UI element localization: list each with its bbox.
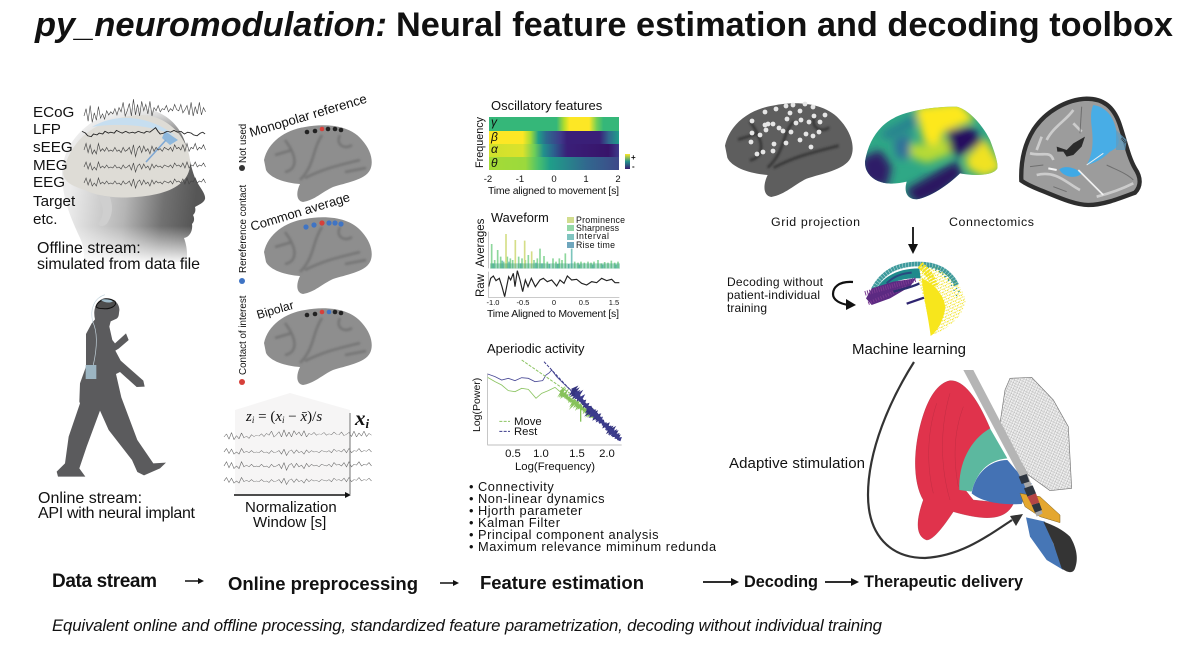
chart: waveform averages and raw trace: 1.5 xyxy=(609,298,619,307)
brain: connectivity colour map xyxy=(865,106,998,200)
normalization formula: x̄)/s xyxy=(300,409,322,425)
brain: monopolar reference xyxy=(248,91,372,202)
pipeline labels: Therapeutic delivery xyxy=(864,573,1023,591)
list: additional features xyxy=(470,482,716,551)
icon: walking person with implant xyxy=(57,295,166,477)
chart: log power spectrum: 1.5 xyxy=(569,448,585,460)
arrow: to machine learning xyxy=(908,227,918,254)
projection labels: Grid projection xyxy=(771,215,860,229)
chart: waveform averages and raw trace: 0.5 xyxy=(579,298,589,307)
normalization formula: i xyxy=(252,415,255,425)
list: additional features: • xyxy=(469,515,473,530)
chart: time-frequency heatmap: -1 xyxy=(516,174,524,185)
panel: machine learning xyxy=(727,264,966,358)
chart: time-frequency heatmap: α xyxy=(491,142,499,156)
chart: time-frequency heatmap: Time aligned to movement [s] xyxy=(488,185,619,197)
legend: electrode contact types: Rereference contact xyxy=(238,185,249,273)
brain: electrode grid projection xyxy=(725,102,853,197)
normalization caption: Normalization xyxy=(245,499,337,516)
list: additional features: • xyxy=(469,539,473,554)
modality list: EEG xyxy=(33,174,65,191)
brain: common average xyxy=(248,189,372,294)
modality list xyxy=(33,104,76,228)
decoding note xyxy=(727,275,824,315)
brain slice: connectomic tract map xyxy=(1021,99,1140,205)
online stream caption: Online stream: xyxy=(38,490,142,507)
panel: oscillatory features xyxy=(474,98,636,197)
normalization formula: i xyxy=(282,415,285,425)
offline stream caption: simulated from data file xyxy=(37,256,200,273)
online stream caption: API with neural implant xyxy=(38,505,196,522)
chart: log power spectrum xyxy=(471,360,622,473)
legend: electrode contact types xyxy=(238,124,249,385)
modality list: LFP xyxy=(33,121,61,138)
pipeline labels: Online preprocessing xyxy=(228,573,418,594)
legend: colorbar xyxy=(625,153,636,171)
chart: time-frequency heatmap: -2 xyxy=(484,174,492,185)
machine learning label: Machine learning xyxy=(852,341,966,358)
chart: log power spectrum: Move xyxy=(514,416,542,428)
list: additional features: Hjorth parameter xyxy=(478,503,583,518)
chart: log power spectrum: 2.0 xyxy=(599,448,615,460)
chart: decoding embedding scatter xyxy=(865,264,966,336)
chart: log power spectrum: 0.5 xyxy=(505,448,521,460)
chart: time-frequency heatmap: β xyxy=(490,130,498,144)
modality list: Target xyxy=(33,193,76,210)
normalization caption xyxy=(245,499,337,531)
illustration: subcortical anatomy with DBS lead xyxy=(915,370,1077,572)
arrow: preprocessing to features xyxy=(440,580,459,586)
chart: time-frequency heatmap: 0 xyxy=(551,174,557,185)
offline stream caption xyxy=(37,240,200,273)
chart: waveform averages and raw trace: Raw xyxy=(475,273,487,297)
normalization caption: Window [s] xyxy=(253,514,326,531)
heading: Oscillatory features xyxy=(491,98,603,113)
chart: log power spectrum: 1.0 xyxy=(533,448,549,460)
panel: normalization xyxy=(224,393,372,531)
icon: head silhouette with brain xyxy=(60,104,205,264)
chart: time-frequency heatmap: γ xyxy=(491,115,498,129)
chart: waveform averages and raw trace: Time Aligned to Movement [s] xyxy=(487,308,619,320)
panel: rereferencing schemes xyxy=(238,91,372,385)
arrow: features to decoding xyxy=(703,578,739,586)
chart: time-frequency heatmap: θ xyxy=(491,156,498,170)
normalization formula: x xyxy=(355,406,366,430)
list: additional features: • xyxy=(469,479,473,494)
projection labels xyxy=(771,215,1034,229)
list: additional features: Principal component analysis xyxy=(478,527,659,542)
modality list: sEEG xyxy=(33,139,73,156)
chart: time-frequency heatmap: 1 xyxy=(583,174,589,185)
legend: waveform metrics xyxy=(567,215,625,250)
chart: log power spectrum: Log(Frequency) xyxy=(515,461,595,473)
summary caption: Equivalent online and offline processing, standardized feature parametrization, decoding without individual training xyxy=(52,616,883,635)
normalization formula: i xyxy=(366,416,370,431)
panel: grid projection and connectomics xyxy=(725,99,1140,229)
normalization formula: = ( xyxy=(254,409,275,425)
pipeline labels: Decoding xyxy=(744,573,818,591)
decoding note: patient-individual xyxy=(727,288,820,302)
modality list: MEG xyxy=(33,157,68,174)
list: additional features: Non-linear dynamics xyxy=(478,491,605,506)
brain: common average: Common average xyxy=(248,189,352,234)
legend: waveform metrics: Rise time xyxy=(576,240,615,250)
heading: Waveform xyxy=(491,210,549,225)
arrow: stream to preprocessing xyxy=(185,578,204,584)
adaptive stimulation label: Adaptive stimulation xyxy=(729,455,865,472)
decoding note: training xyxy=(727,301,767,315)
normalization formula: − xyxy=(285,409,300,425)
list: additional features: • xyxy=(469,527,473,542)
brain: bipolar xyxy=(255,298,372,385)
legend: electrode contact types: Not used xyxy=(238,124,249,163)
arrow: decoding loop xyxy=(833,282,856,310)
list: additional features: Connectivity xyxy=(478,479,554,494)
chart: time-frequency heatmap: 2 xyxy=(615,174,621,185)
legend: waveform metrics: Sharpness xyxy=(576,223,620,233)
legend: waveform metrics: Interval xyxy=(576,231,609,241)
title xyxy=(34,6,1173,44)
legend: colorbar: - xyxy=(632,162,635,171)
chart: log power spectrum: Log(Power) xyxy=(471,378,483,432)
offline stream caption: Offline stream: xyxy=(37,240,141,257)
chart: waveform averages and raw trace: -1.0 xyxy=(487,298,499,307)
arrow: decoding to delivery xyxy=(825,578,859,586)
modality list: ECoG xyxy=(33,104,74,121)
chart: waveform averages and raw trace: Averages xyxy=(475,218,487,267)
normalization formula xyxy=(245,406,370,431)
chart: time-frequency heatmap: Frequency xyxy=(474,116,486,168)
legend: waveform metrics: Prominence xyxy=(576,215,625,225)
normalization formula: x xyxy=(275,409,282,425)
panel: waveform xyxy=(475,210,625,320)
online stream caption xyxy=(38,490,196,522)
legend: colorbar: + xyxy=(631,153,636,162)
arrow: normalization window xyxy=(234,492,351,498)
title: Neural feature estimation and decoding toolbox xyxy=(396,6,1173,44)
chart: waveform averages and raw trace: -0.5 xyxy=(517,298,529,307)
list: additional features: Maximum relevance miminum redundancy xyxy=(478,539,738,554)
projection labels: Connectomics xyxy=(949,215,1034,229)
decoding note: Decoding without xyxy=(727,275,824,289)
list: additional features: Kalman Filter xyxy=(478,515,561,530)
pipeline labels: Feature estimation xyxy=(480,572,644,593)
modality list: etc. xyxy=(33,211,57,228)
chart: time-frequency heatmap xyxy=(474,115,621,197)
panel: online data stream xyxy=(38,295,196,522)
normalization formula: z xyxy=(246,409,252,425)
panel: adaptive stimulation xyxy=(729,362,1077,572)
pipeline labels: Data stream xyxy=(52,571,157,592)
legend: electrode contact types: Contact of interest xyxy=(238,295,249,375)
chart: raw signal traces xyxy=(82,99,206,188)
brain: monopolar reference: Monopolar reference xyxy=(248,91,369,140)
panel: offline data stream xyxy=(33,99,206,273)
arrow: adaptive stimulation loop xyxy=(868,362,1023,558)
chart: normalized traces xyxy=(224,430,372,484)
list: additional features: • xyxy=(469,503,473,518)
chart: log power spectrum: Rest xyxy=(514,426,538,438)
heading: Aperiodic activity xyxy=(487,341,585,356)
title: py_neuromodulation: xyxy=(34,6,387,44)
chart: waveform averages and raw trace: 0 xyxy=(552,298,556,307)
brain: bipolar: Bipolar xyxy=(255,298,295,322)
panel: aperiodic activity xyxy=(470,344,716,551)
pipeline labels xyxy=(52,571,1023,594)
chart: waveform averages and raw trace xyxy=(475,218,620,320)
list: additional features: • xyxy=(469,491,473,506)
